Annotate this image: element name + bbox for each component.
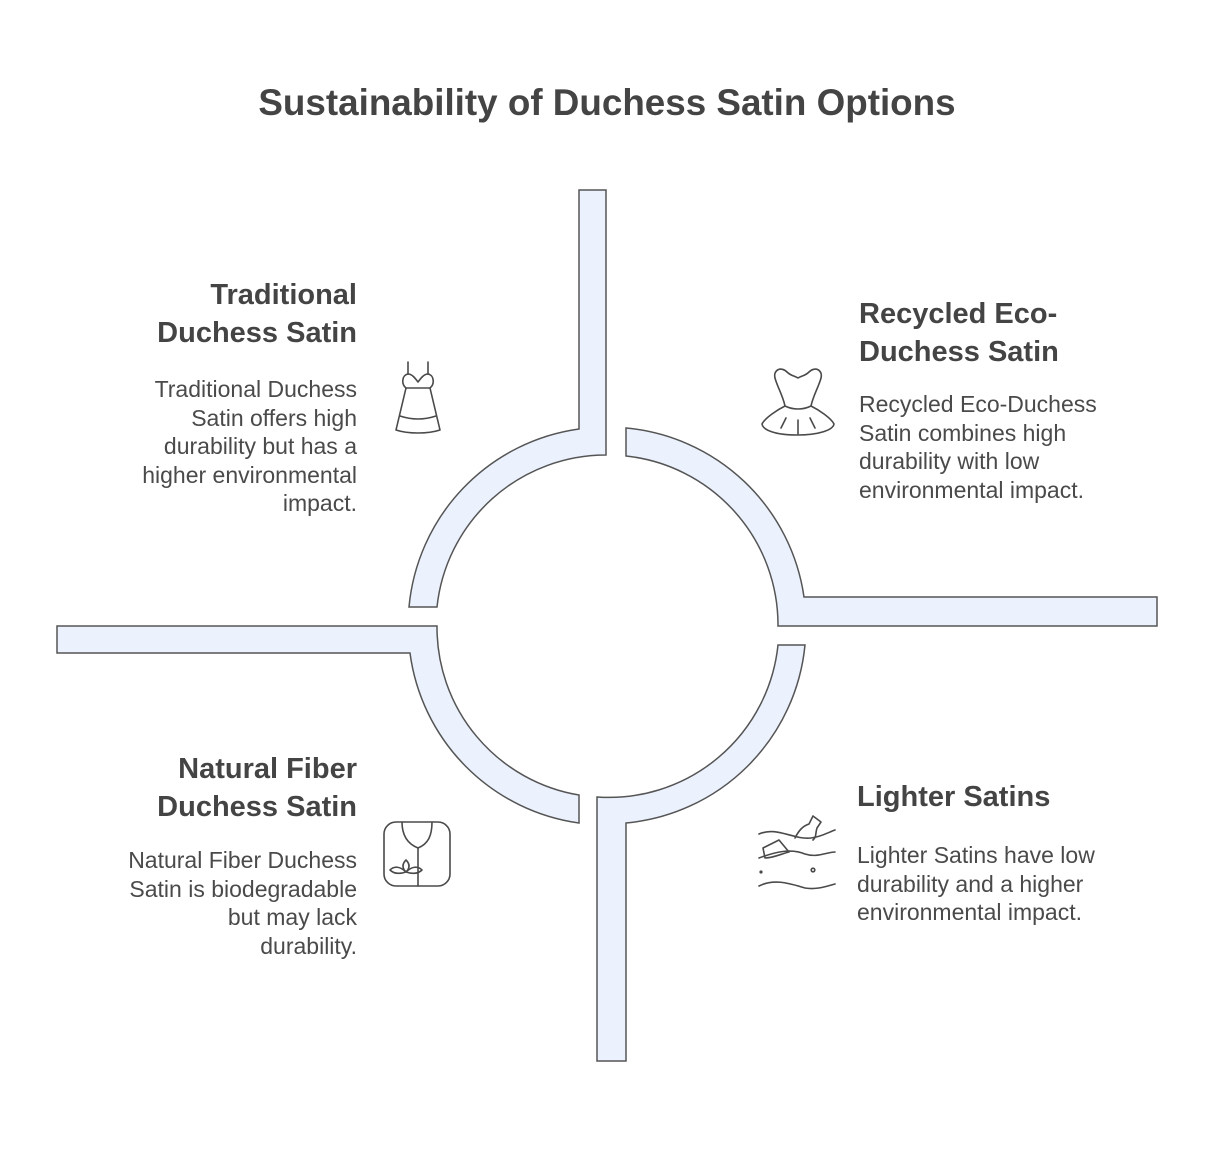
text: recycled: environmental impact. [859, 477, 1084, 503]
text: traditional: Traditional Duchess [155, 376, 357, 402]
text: recycled [859, 391, 1097, 503]
text: traditional [142, 376, 358, 516]
title: Sustainability of Duchess Satin Options [258, 82, 956, 123]
text: traditional: impact. [283, 490, 357, 516]
heading: lighter: Lighter Satins [857, 781, 1050, 813]
icon: waves with debris [758, 815, 836, 890]
heading: natural: Duchess Satin [157, 791, 357, 823]
text: recycled: Satin combines high [859, 420, 1066, 446]
text: lighter [857, 842, 1095, 925]
panel: traditional [142, 279, 358, 516]
panel: natural [128, 753, 357, 959]
text: lighter: durability and a higher [857, 871, 1083, 897]
text: natural: durability. [260, 933, 357, 959]
icon: dress [395, 361, 441, 434]
panel: recycled [859, 298, 1097, 503]
panel: lighter [857, 781, 1095, 925]
text: traditional: Satin offers high [191, 405, 357, 431]
heading: recycled [859, 298, 1059, 368]
heading: natural [157, 753, 357, 823]
heading: recycled: Duchess Satin [859, 336, 1059, 368]
text: traditional: higher environmental [142, 462, 357, 488]
text: lighter: environmental impact. [857, 899, 1082, 925]
heading: natural: Natural Fiber [178, 753, 357, 785]
text: recycled: durability with low [859, 448, 1039, 474]
heading: recycled: Recycled Eco- [859, 298, 1057, 330]
text: recycled: Recycled Eco-Duchess [859, 391, 1097, 417]
heading: traditional: Duchess Satin [157, 317, 357, 349]
heading: traditional: Traditional [210, 279, 357, 311]
text: natural: but may lack [228, 904, 357, 930]
text: natural [128, 847, 357, 959]
icon: corset gown [761, 368, 835, 436]
text: natural: Natural Fiber Duchess [128, 847, 357, 873]
text: lighter: Lighter Satins have low [857, 842, 1095, 868]
icon: jacket with leaves [383, 821, 451, 887]
text: natural: Satin is biodegradable [129, 876, 357, 902]
text: traditional: durability but has a [164, 433, 357, 459]
heading: traditional [157, 279, 357, 349]
